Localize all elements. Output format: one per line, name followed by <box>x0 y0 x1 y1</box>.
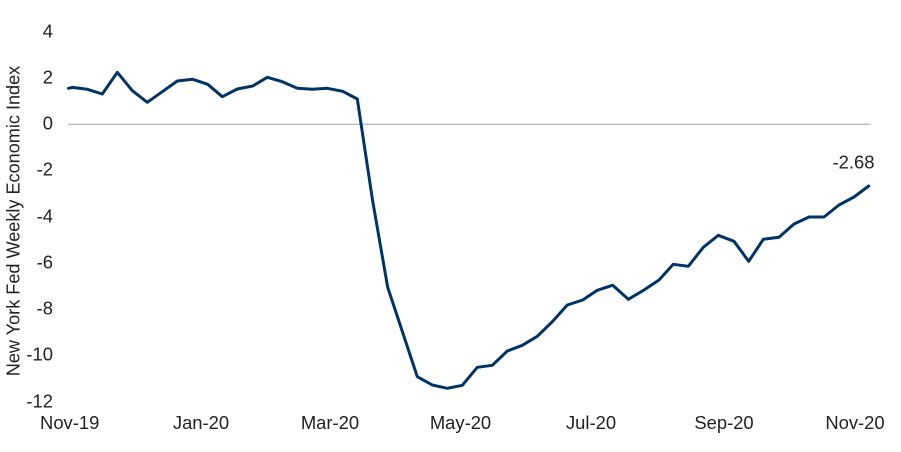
x-axis tick labels <box>40 412 885 433</box>
zero baseline <box>68 123 870 125</box>
y-axis tick labels: -10 <box>26 344 53 364</box>
x-axis tick labels: May-20 <box>430 412 491 433</box>
y-axis tick labels: -2 <box>37 158 53 180</box>
y-axis tick labels: 0 <box>43 112 53 134</box>
x-axis tick labels: Sep-20 <box>694 412 754 433</box>
end value callout: -2.68 <box>833 152 874 172</box>
x-axis tick labels: Jan-20 <box>173 412 229 433</box>
y-axis title: New York Fed Weekly Economic Index <box>4 66 24 376</box>
x-axis tick labels: Jul-20 <box>566 412 616 433</box>
y-axis tick labels: -6 <box>37 252 53 272</box>
x-axis tick labels: Nov-20 <box>825 412 885 433</box>
y-axis tick labels <box>26 20 53 412</box>
y-axis tick labels: -4 <box>37 206 53 226</box>
y-axis tick labels: 4 <box>43 20 53 42</box>
y-axis tick labels: -12 <box>26 390 53 412</box>
y-axis tick labels: -8 <box>37 298 53 318</box>
x-axis tick labels: Mar-20 <box>301 412 359 433</box>
index data line <box>68 72 869 388</box>
y-axis tick labels: 2 <box>43 66 53 88</box>
x-axis tick labels: Nov-19 <box>40 412 99 433</box>
